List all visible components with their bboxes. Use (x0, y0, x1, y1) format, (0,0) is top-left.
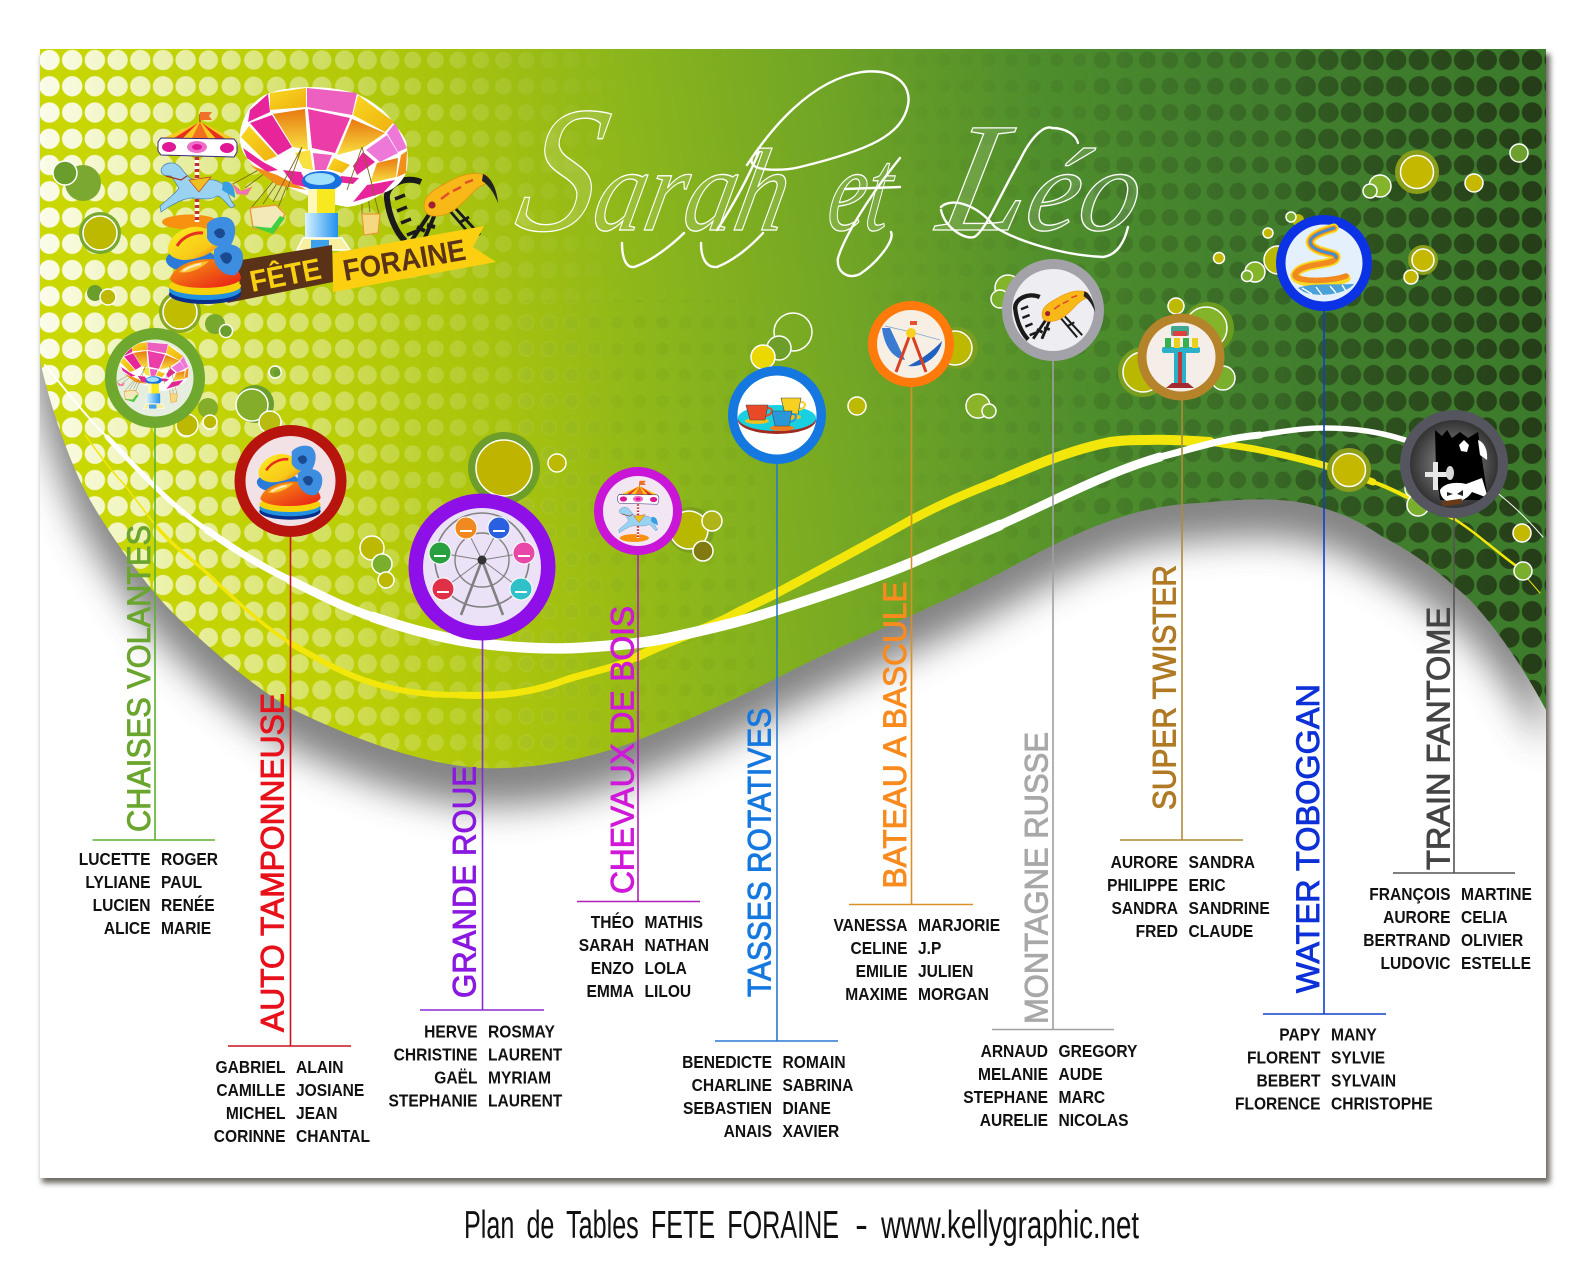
names: Train Fantome: ESTELLE (1461, 953, 1531, 973)
heading: Train Fantome: TRAIN FANTOME (1420, 607, 1456, 870)
names: Montagne Russe (963, 1041, 1137, 1130)
names: Chaises Volantes (79, 849, 218, 938)
names: Bateau a Bascule: MORGAN (918, 984, 989, 1004)
logo: fête foraine (158, 87, 498, 304)
names: Bateau a Bascule: JULIEN (918, 961, 973, 981)
attraction: Bateau a Bascule (833, 301, 1000, 1004)
names: Auto Tamponneuse: GABRIEL (216, 1057, 286, 1077)
names: Super Twister: CLAUDE (1188, 921, 1253, 941)
icon: twister tower (1138, 314, 1224, 400)
heading: Montagne Russe: MONTAGNE RUSSE (1018, 732, 1054, 1024)
names: Montagne Russe: MARC (1058, 1087, 1105, 1107)
icon: carousel logo (158, 112, 237, 230)
names: Tasses Rotatives: BENEDICTE (682, 1052, 772, 1072)
names: Super Twister: SANDRA (1111, 898, 1178, 918)
names: Water Toboggan: SYLVIE (1331, 1047, 1385, 1068)
icon: bumper cars (234, 425, 346, 537)
names: Train Fantome: MARTINE (1461, 884, 1532, 904)
names: Super Twister: FRED (1136, 921, 1178, 941)
names: Bateau a Bascule (833, 915, 1000, 1004)
names: Chevaux de Bois: NATHAN (644, 935, 709, 955)
heading: Super Twister: SUPER TWISTER (1146, 565, 1182, 810)
names: Chaises Volantes: LUCIEN (93, 895, 150, 915)
names: Auto Tamponneuse: CAMILLE (216, 1080, 286, 1100)
names: Chevaux de Bois: LOLA (644, 958, 687, 978)
names: Auto Tamponneuse: ALAIN (296, 1057, 344, 1077)
names: Tasses Rotatives: CHARLINE (692, 1075, 772, 1095)
names: Auto Tamponneuse: CORINNE (214, 1126, 286, 1146)
names: Tasses Rotatives: SABRINA (782, 1075, 853, 1095)
names: Montagne Russe: ARNAUD (981, 1041, 1048, 1061)
names: Chevaux de Bois: EMMA (586, 981, 634, 1001)
names: Chevaux de Bois (579, 912, 709, 1001)
heading: Chevaux de Bois: CHEVAUX DE BOIS (604, 606, 640, 894)
names: Bateau a Bascule: VANESSA (833, 915, 908, 935)
attraction: Train Fantome (1363, 410, 1532, 973)
attraction: Chevaux de Bois (577, 467, 709, 1001)
names: Water Toboggan: FLORENCE (1235, 1093, 1320, 1114)
names: Auto Tamponneuse: CHANTAL (296, 1126, 370, 1146)
names: Bateau a Bascule: MARJORIE (918, 915, 1000, 935)
footer caption: - (855, 1204, 868, 1247)
attraction: Grande Roue (388, 494, 563, 1111)
heading: Grande Roue: GRANDE ROUE (446, 766, 482, 998)
title: Sarah et Léo: Sarah (504, 69, 815, 269)
icon: ferris wheel (408, 494, 556, 640)
names: Montagne Russe: GREGORY (1058, 1041, 1137, 1061)
names: Chevaux de Bois: MATHIS (644, 912, 703, 932)
attraction: Super Twister (1107, 314, 1270, 941)
names: Super Twister: ERIC (1188, 875, 1226, 895)
names: Montagne Russe: STEPHANE (963, 1087, 1048, 1107)
attraction: Water Toboggan (1235, 215, 1433, 1114)
names: Chaises Volantes: PAUL (161, 872, 202, 892)
panel: green gradient wave background (40, 49, 1546, 809)
names: Tasses Rotatives (682, 1052, 853, 1141)
names: Chaises Volantes: MARIE (161, 918, 211, 938)
footer caption: Plan de Tables FETE FORAINE (464, 1204, 839, 1247)
names: Grande Roue: STEPHANIE (388, 1090, 478, 1111)
names: Train Fantome: FRANÇOIS (1369, 884, 1450, 904)
names: Train Fantome: LUDOVIC (1381, 953, 1450, 973)
names: Super Twister (1107, 852, 1270, 941)
title: Sarah et Léo (504, 69, 1163, 276)
banner: brown FÊTE (223, 245, 333, 303)
heading: Bateau a Bascule: BATEAU A BASCULE (877, 582, 913, 888)
icon: chaises volantes (105, 328, 205, 428)
names: Bateau a Bascule: MAXIME (845, 984, 908, 1004)
names: Auto Tamponneuse: JOSIANE (296, 1080, 364, 1100)
icon: water slide (1276, 215, 1372, 311)
names: Chaises Volantes: RENÉE (161, 895, 215, 915)
names: Grande Roue: HERVE (424, 1021, 478, 1042)
yellow wave (85, 435, 1540, 695)
names: Chevaux de Bois: THÉO (591, 912, 634, 932)
names: Super Twister: SANDRINE (1188, 898, 1270, 918)
banner: yellow FORAINE: FORAINE (340, 234, 468, 288)
title: Sarah et Léo: Léo (926, 92, 1163, 265)
names: Tasses Rotatives: XAVIER (782, 1121, 839, 1141)
heading: Tasses Rotatives: TASSES ROTATIVES (742, 708, 778, 997)
names: Grande Roue: GAËL (434, 1067, 478, 1088)
names: Water Toboggan: FLORENT (1247, 1047, 1321, 1068)
names: Chaises Volantes: LUCETTE (79, 849, 150, 869)
icon: coaster logo (387, 173, 498, 241)
names: Chevaux de Bois: ENZO (591, 958, 634, 978)
names: Auto Tamponneuse: MICHEL (226, 1103, 286, 1123)
names: Train Fantome: CELIA (1461, 907, 1508, 927)
names: Super Twister: PHILIPPE (1107, 875, 1178, 895)
title: Sarah et Léo: e (821, 126, 877, 256)
names: Super Twister: AURORE (1111, 852, 1178, 872)
attraction: Auto Tamponneuse (214, 425, 370, 1146)
names: Chaises Volantes: ALICE (104, 918, 150, 938)
heading: Chaises Volantes: CHAISES VOLANTES (121, 525, 157, 832)
names: Montagne Russe: AURELIE (980, 1110, 1048, 1130)
names: Water Toboggan: CHRISTOPHE (1331, 1093, 1433, 1114)
icon: swinging boat (868, 301, 954, 387)
names: Montagne Russe: MELANIE (978, 1064, 1048, 1084)
names: Tasses Rotatives: SEBASTIEN (683, 1098, 772, 1118)
icon: ghost train (1400, 410, 1508, 518)
footer caption: www.kellygraphic.net (880, 1204, 1139, 1247)
names: Tasses Rotatives: ROMAIN (782, 1052, 846, 1072)
names: Tasses Rotatives: ANAIS (724, 1121, 772, 1141)
names: Chevaux de Bois: LILOU (644, 981, 691, 1001)
attraction: Montagne Russe (963, 259, 1137, 1130)
names: Bateau a Bascule: J.P (918, 938, 941, 958)
names: Super Twister: SANDRA (1188, 852, 1255, 872)
names: Montagne Russe: NICOLAS (1058, 1110, 1128, 1130)
names: Bateau a Bascule: CELINE (850, 938, 908, 958)
names: Chevaux de Bois: SARAH (579, 935, 634, 955)
names: Chaises Volantes: ROGER (161, 849, 218, 869)
icon: carousel (594, 467, 682, 555)
names: Train Fantome: BERTRAND (1363, 930, 1450, 950)
names: Train Fantome: AURORE (1383, 907, 1450, 927)
names: Water Toboggan: BEBERT (1257, 1070, 1321, 1091)
names: Water Toboggan (1235, 1024, 1433, 1114)
title: Sarah et Léo: t (859, 126, 902, 256)
heading: Auto Tamponneuse: AUTO TAMPONNEUSE (254, 693, 290, 1032)
names: Auto Tamponneuse: JEAN (296, 1103, 338, 1123)
names: Water Toboggan: MANY (1331, 1024, 1377, 1045)
attraction: Chaises Volantes (79, 328, 218, 938)
names: Grande Roue: CHRISTINE (394, 1044, 478, 1065)
names: Grande Roue: LAURENT (488, 1044, 563, 1065)
names: Auto Tamponneuse (214, 1057, 370, 1146)
icon: swing ride logo (232, 87, 408, 250)
names: Grande Roue: ROSMAY (488, 1021, 555, 1042)
names: Train Fantome (1363, 884, 1532, 973)
banner: brown FÊTE: FÊTE (247, 252, 324, 299)
names: Grande Roue: MYRIAM (488, 1067, 551, 1088)
names: Chaises Volantes: LYLIANE (85, 872, 150, 892)
names: Train Fantome: OLIVIER (1461, 930, 1523, 950)
white wave (45, 365, 1543, 648)
icon: tea cups (728, 366, 826, 464)
names: Water Toboggan: PAPY (1279, 1024, 1320, 1045)
names: Tasses Rotatives: DIANE (782, 1098, 831, 1118)
names: Water Toboggan: SYLVAIN (1331, 1070, 1396, 1091)
attraction: Tasses Rotatives (682, 366, 853, 1141)
names: Grande Roue: LAURENT (488, 1090, 563, 1111)
decorative bubbles (53, 144, 1532, 588)
names: Montagne Russe: AUDE (1058, 1064, 1103, 1084)
names: Bateau a Bascule: EMILIE (856, 961, 908, 981)
heading: Water Toboggan: WATER TOBOGGAN (1290, 684, 1326, 993)
names: Grande Roue (388, 1021, 563, 1111)
icon: bumper cars logo (166, 217, 243, 304)
icon: roller coaster (1002, 259, 1104, 361)
